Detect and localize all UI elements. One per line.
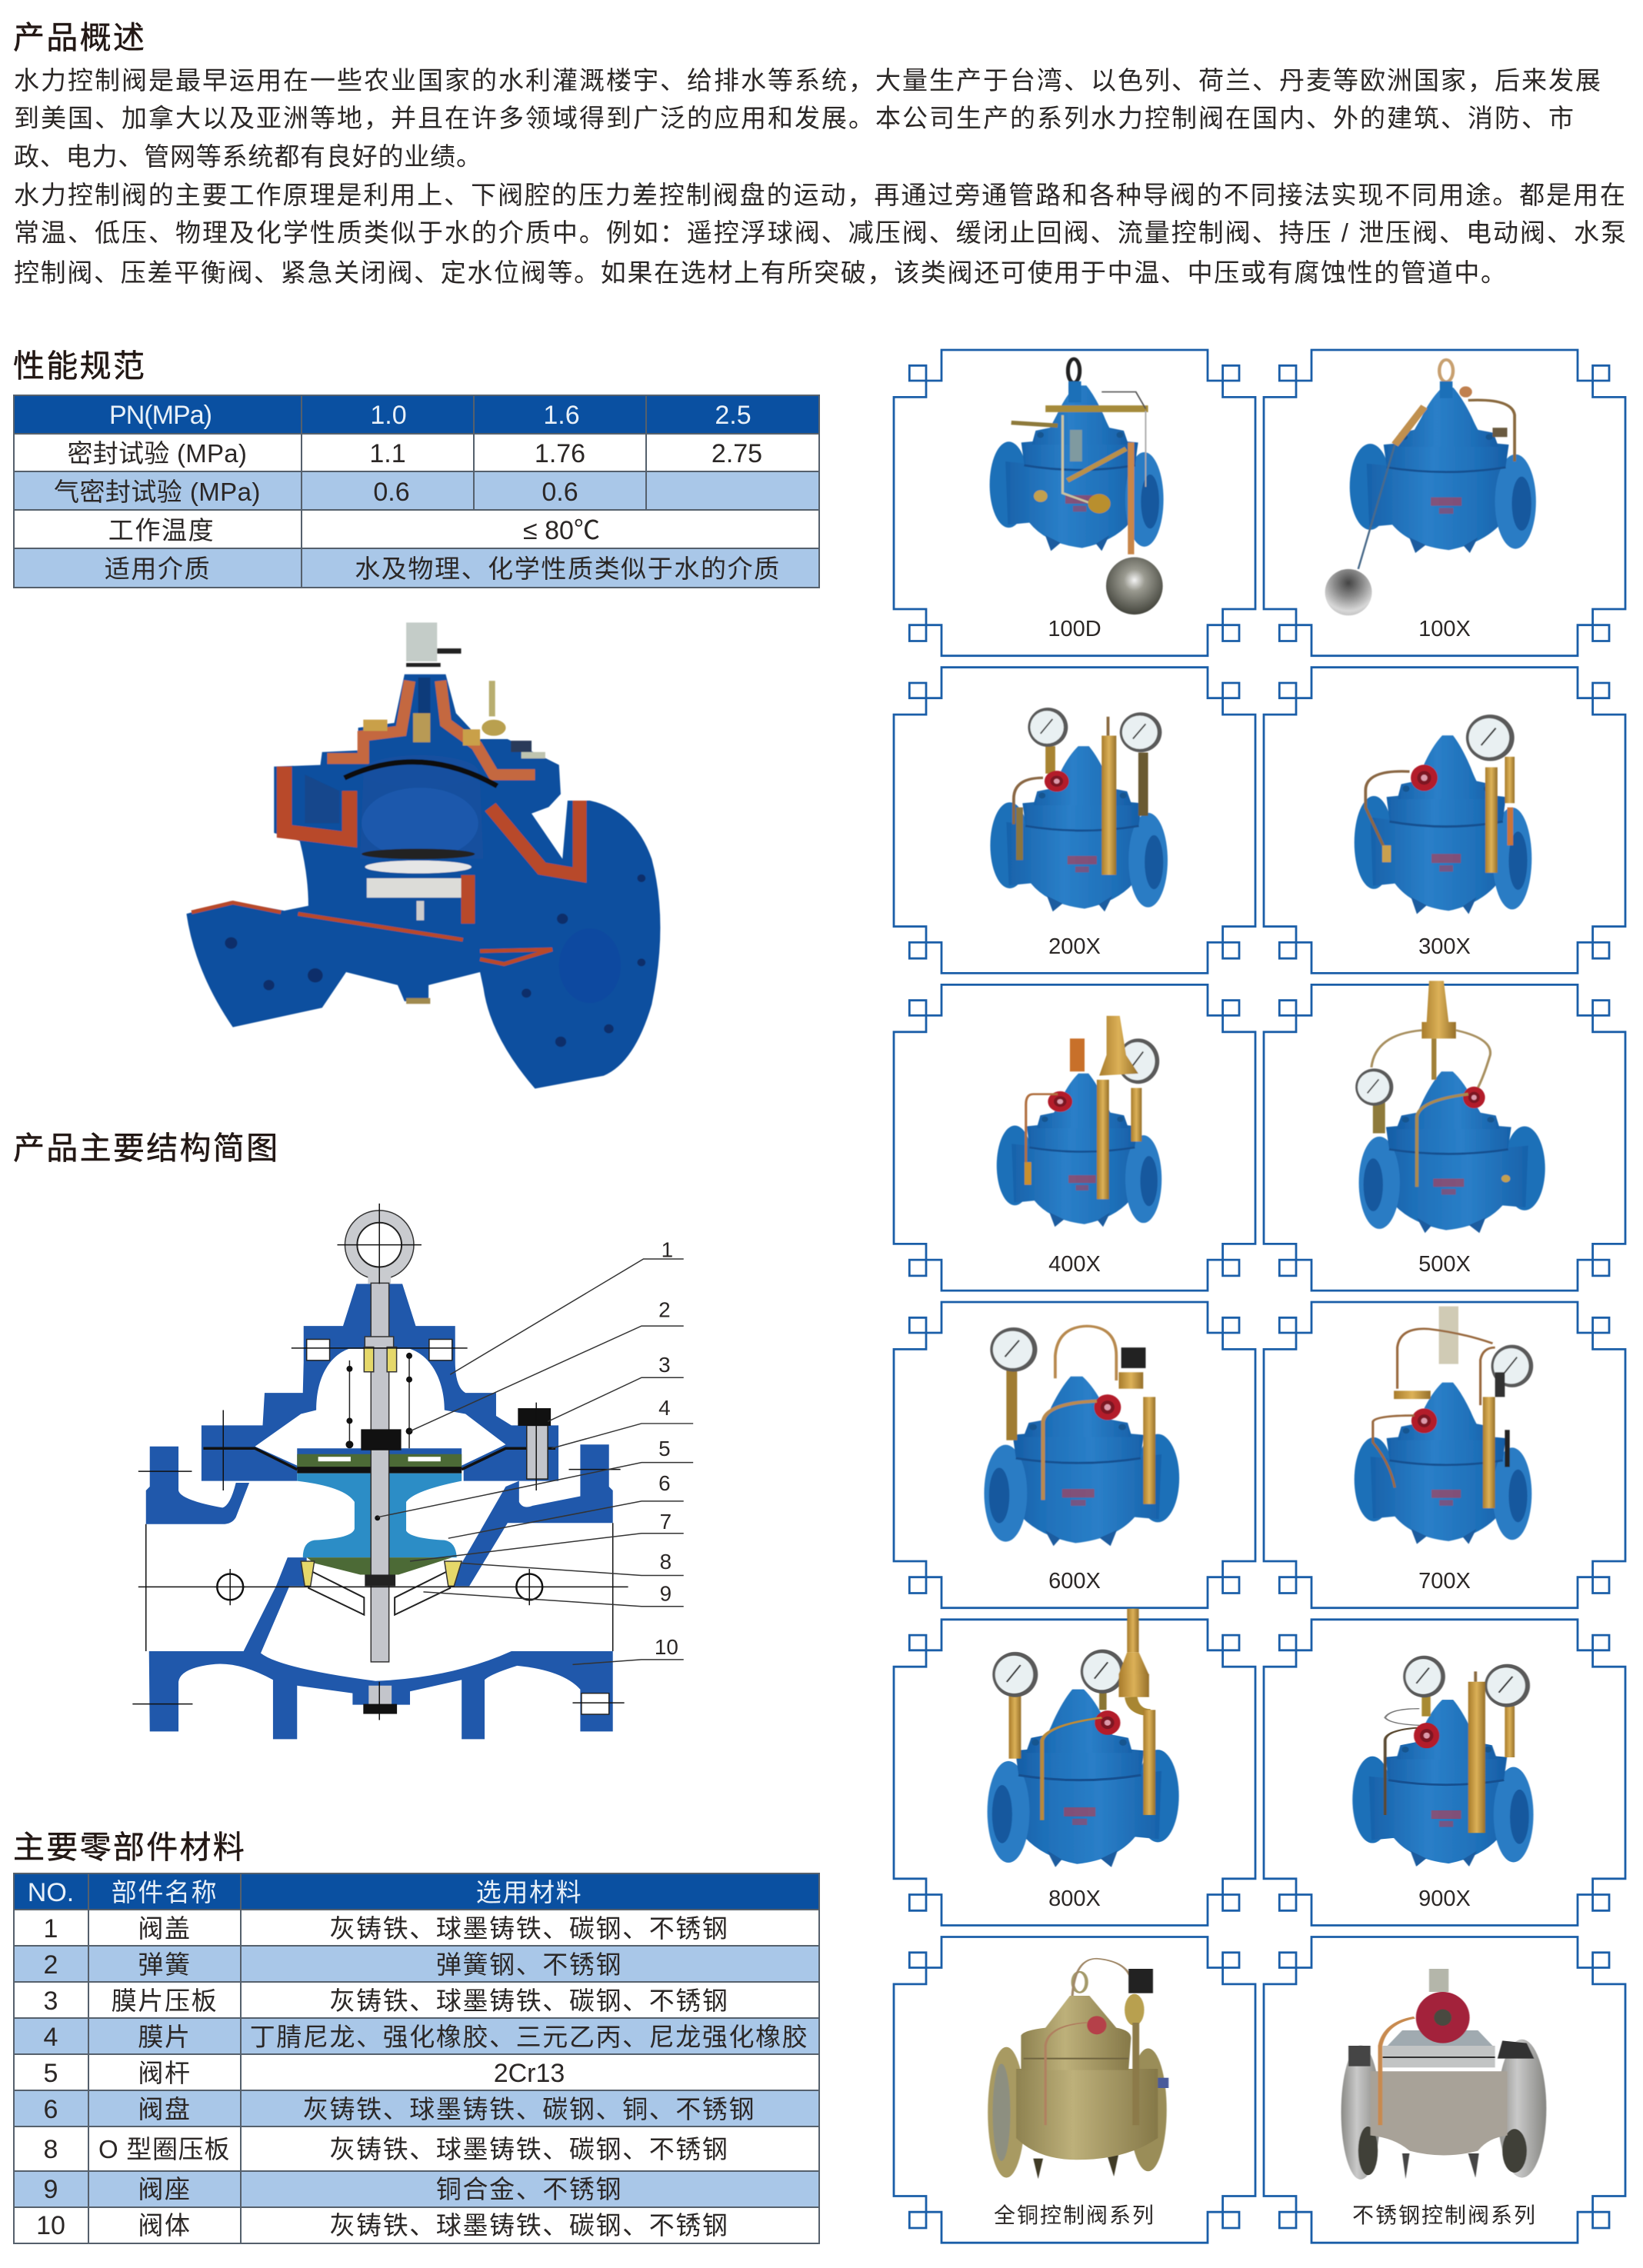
diagram: flange bolts and spring: [307, 1339, 330, 1360]
table: main parts materials: 5: [44, 2059, 58, 2088]
table: performance specification: PN(MPa): [109, 401, 212, 430]
table: main parts materials: 弹簧: [138, 1950, 192, 1979]
table: main parts materials: 弹簧钢、不锈钢: [436, 1950, 622, 1979]
panel: 800X valve: [894, 1609, 1255, 1926]
icon: 400X valve: [997, 1016, 1161, 1227]
table: performance specification: 气密封试验 (MPa): [54, 478, 262, 506]
diagram: part numbers: [655, 1238, 678, 1659]
table: main parts materials: 铜合金、不锈钢: [436, 2175, 622, 2203]
table: main parts materials: 阀杆: [138, 2059, 192, 2087]
text block: product overview: [14, 66, 1626, 287]
diagram: part numbers: 7: [660, 1510, 672, 1534]
heading: main structure diagram: 产品主要结构简图: [13, 1131, 279, 1166]
table: main parts materials: 4: [44, 2023, 58, 2052]
diagram: part numbers: 8: [660, 1550, 672, 1574]
label: 600X: [1048, 1569, 1101, 1594]
label: 100X: [1418, 617, 1471, 641]
heading: product overview: 产品概述: [13, 20, 146, 55]
heading: main parts materials: 主要零部件材料: [13, 1830, 246, 1865]
panel: 100X valve: [1264, 350, 1625, 656]
table: main parts materials: 选用材料: [476, 1878, 582, 1907]
table: performance specification: 1.76: [535, 439, 585, 468]
panel: 700X valve: [1264, 1302, 1625, 1608]
table: main parts materials: 膜片: [138, 2023, 192, 2051]
frame: [1264, 1302, 1625, 1608]
diagram: part numbers: 10: [655, 1635, 678, 1659]
diagram: leader lines: [378, 1259, 693, 1664]
diagram: eye bolt: [351, 1217, 408, 1273]
panel: 900X valve: [1264, 1620, 1625, 1926]
label: 800X: [1048, 1887, 1101, 1911]
diagram: seat: [308, 1570, 450, 1615]
table: performance specification: 1.1: [369, 439, 406, 468]
icon: 200X valve: [990, 708, 1168, 911]
text block: product overview: 常温、低压、物理及化学性质类似于水的介质中。例如：遥控浮球阀、减压阀、缓闭止回阀、流量控制阀、持压 / 泄压阀、电动阀、水泵: [14, 218, 1626, 247]
table: main parts materials: NO.: [28, 1878, 74, 1907]
table: performance specification: 0.6: [373, 478, 410, 507]
table: main parts materials: O 型圈压板: [98, 2135, 231, 2163]
panel: 500X valve: [1264, 981, 1625, 1291]
table: performance specification: [14, 395, 819, 588]
icon: 300X valve: [1355, 714, 1531, 914]
table: main parts materials: 灰铸铁、球墨铸铁、碳钢、不锈钢: [329, 1987, 729, 2015]
frame: [1264, 1620, 1625, 1926]
label: 200X: [1048, 934, 1101, 959]
table: main parts materials: 阀盖: [138, 1914, 192, 1943]
text block: product overview: 到美国、加拿大以及亚洲等地，并且在许多领域得到广泛的应用和发展。本公司生产的系列水力控制阀在国内、外的建筑、消防、市: [14, 104, 1574, 132]
frame: [894, 1620, 1255, 1926]
text block: product overview: 控制阀、压差平衡阀、紧急关闭阀、定水位阀等。如果在选材上有所突破，该类阀还可使用于中温、中压或有腐蚀性的管道中。: [14, 258, 1506, 287]
frame: [894, 984, 1255, 1291]
diagram: inspection holes: [217, 1574, 542, 1600]
table: main parts materials: 部件名称: [112, 1878, 218, 1907]
frame: [1264, 350, 1625, 656]
diagram: part numbers: 6: [658, 1471, 671, 1495]
table: main parts materials: 灰铸铁、球墨铸铁、碳钢、不锈钢: [329, 1914, 729, 1943]
table: main parts materials: 9: [44, 2175, 58, 2204]
diagram: stem: [371, 1283, 389, 1662]
panel: 400X valve: [894, 984, 1255, 1291]
table: performance specification: 密封试验 (MPa): [68, 439, 248, 468]
table: main parts materials: 灰铸铁、球墨铸铁、碳钢、不锈钢: [329, 2211, 729, 2240]
diagram: part numbers: 1: [662, 1238, 673, 1262]
table: main parts materials: 10: [36, 2211, 65, 2240]
icon: bronze valve: [988, 1959, 1168, 2179]
label: 700X: [1418, 1569, 1471, 1594]
table: performance specification: 1.6: [543, 401, 580, 430]
label: 400X: [1048, 1252, 1101, 1277]
panel: all-copper valve series: [894, 1937, 1255, 2243]
table: performance specification: ≤ 80℃: [523, 516, 600, 545]
label: 900X: [1418, 1887, 1471, 1911]
icon: 700X valve: [1355, 1307, 1533, 1544]
label: 500X: [1418, 1252, 1471, 1277]
diagram: part numbers: 2: [658, 1298, 671, 1322]
diagram: valve body casting: [146, 1444, 613, 1739]
label: 300X: [1418, 934, 1471, 959]
table: main parts materials: 阀盘: [138, 2095, 192, 2123]
panel: 300X valve: [1264, 668, 1625, 973]
text block: product overview: 水力控制阀是最早运用在一些农业国家的水利灌溉楼宇、给排水等系统，大量生产于台湾、以色列、荷兰、丹麦等欧洲国家，后来发展: [14, 66, 1601, 95]
frame: [894, 350, 1255, 656]
table: main parts materials: [14, 1873, 819, 2243]
table: performance specification: 工作温度: [108, 516, 215, 545]
table: main parts materials: 6: [44, 2095, 58, 2124]
frame: [894, 1302, 1255, 1608]
table: performance specification: 2.75: [712, 439, 762, 468]
table: main parts materials: 灰铸铁、球墨铸铁、碳钢、不锈钢: [329, 2135, 729, 2163]
text block: product overview: 政、电力、管网等系统都有良好的业绩。: [14, 142, 482, 171]
diagram: part numbers: 5: [658, 1437, 671, 1460]
frame: [894, 668, 1255, 973]
icon: 500X valve: [1355, 981, 1545, 1233]
icon: 100D valve: [990, 359, 1164, 614]
table: main parts materials: 1: [44, 1914, 58, 1943]
diagram: part numbers: 9: [660, 1581, 672, 1605]
table: main parts materials: 膜片压板: [112, 1987, 218, 2015]
icon: stainless valve: [1341, 1969, 1546, 2180]
table: main parts materials: 8: [44, 2135, 58, 2164]
diagram: valve disc: [297, 1474, 462, 1557]
panel: 200X valve: [894, 668, 1255, 973]
panel: 600X valve: [894, 1302, 1255, 1608]
table: performance specification: 适用介质: [105, 555, 211, 583]
table: main parts materials: 3: [44, 1987, 58, 2016]
table: performance specification: 2.5: [715, 401, 752, 430]
illustration: cutaway valve: [186, 622, 660, 1089]
label: 全铜控制阀系列: [994, 2203, 1155, 2227]
table: performance specification: 水及物理、化学性质类似于水的介质: [355, 555, 781, 583]
diagram: upper bonnet: [202, 1284, 558, 1481]
icon: 100X valve: [1325, 360, 1536, 615]
table: main parts materials: 2: [44, 1950, 58, 1980]
icon: 600X valve: [984, 1326, 1179, 1546]
table: performance specification: 1.0: [370, 401, 407, 430]
table: performance specification: 0.6: [542, 478, 578, 507]
diagram: part numbers: 4: [658, 1396, 671, 1420]
frame: [1264, 668, 1625, 973]
icon: 900X valve: [1352, 1656, 1534, 1867]
frame: [1264, 1937, 1625, 2243]
frame: [1264, 984, 1625, 1291]
diagram: part numbers: 3: [658, 1353, 671, 1377]
label: 100D: [1048, 617, 1101, 641]
table: main parts materials: 灰铸铁、球墨铸铁、碳钢、铜、不锈钢: [303, 2095, 755, 2123]
table: main parts materials: 阀座: [138, 2175, 192, 2203]
icon: 800X valve: [988, 1609, 1179, 1867]
table: main parts materials: 2Cr13: [494, 2059, 565, 2088]
heading: performance specification: 性能规范: [13, 348, 146, 384]
panel: stainless steel valve series: [1264, 1937, 1625, 2243]
label: 不锈钢控制阀系列: [1352, 2203, 1537, 2227]
text block: product overview: 水力控制阀的主要工作原理是利用上、下阀腔的压力差控制阀盘的运动，再通过旁通管路和各种导阀的不同接法实现不同用途。都是用在: [14, 181, 1625, 209]
table: main parts materials: 阀体: [138, 2211, 192, 2240]
frame: [894, 1937, 1255, 2243]
table: main parts materials: 丁腈尼龙、强化橡胶、三元乙丙、尼龙强化橡胶: [250, 2023, 808, 2051]
diagram: valve structure with numbered parts: [132, 1204, 693, 1739]
panel: 100D valve: [894, 350, 1255, 656]
